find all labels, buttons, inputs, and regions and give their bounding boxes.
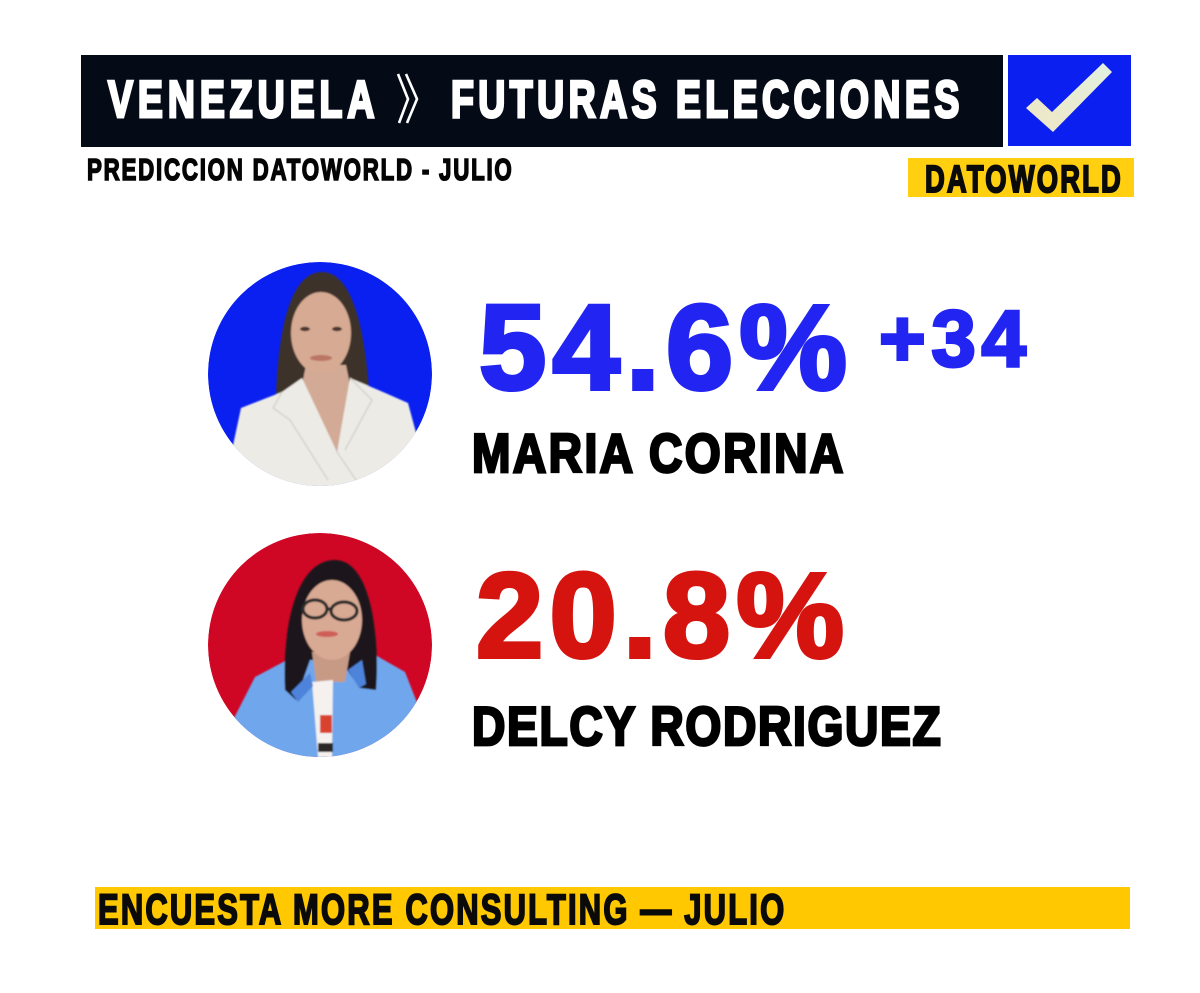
lips (316, 631, 338, 637)
neck (312, 652, 350, 682)
title: Futuras Elecciones: FUTURAS ELECCIONES (451, 70, 959, 128)
name: Delcy Rodriguez: DELCY RODRIGUEZ (472, 695, 941, 757)
icon: check mark box (1008, 55, 1131, 146)
t-shirt (312, 680, 333, 757)
subtitle: PREDICCION DATOWORLD - JULIO (87, 152, 512, 187)
face (302, 580, 362, 660)
eyes and lips (300, 327, 342, 361)
percent: Delcy Rodriguez: 20.8% (476, 547, 844, 683)
title chevrons (398, 74, 417, 123)
portrait: Maria Corina (208, 262, 432, 490)
blue shirt (225, 656, 418, 760)
face (291, 292, 351, 374)
header banner (81, 55, 1003, 147)
footer source bar (95, 885, 1130, 933)
glasses (303, 600, 357, 620)
badge: Datoworld: DATOWORLD (925, 159, 1121, 201)
shirt collar (291, 660, 366, 702)
name: Maria Corina: MARIA CORINA (472, 422, 843, 484)
photo detail group (225, 272, 418, 490)
jacket lapels (273, 378, 372, 486)
lead: +34: +34 (879, 294, 1026, 383)
neck and chest (302, 365, 350, 452)
footer source bar: ENCUESTA MORE CONSULTING — JULIO (98, 885, 784, 933)
photo detail group (225, 560, 418, 760)
hair (276, 272, 369, 402)
title: Venezuela: VENEZUELA (108, 70, 374, 128)
portrait: Delcy Rodriguez (208, 533, 432, 760)
t-shirt print (318, 715, 333, 752)
percent: Maria Corina: 54.6% (479, 279, 847, 415)
hair (285, 560, 377, 700)
white jacket (225, 378, 418, 490)
